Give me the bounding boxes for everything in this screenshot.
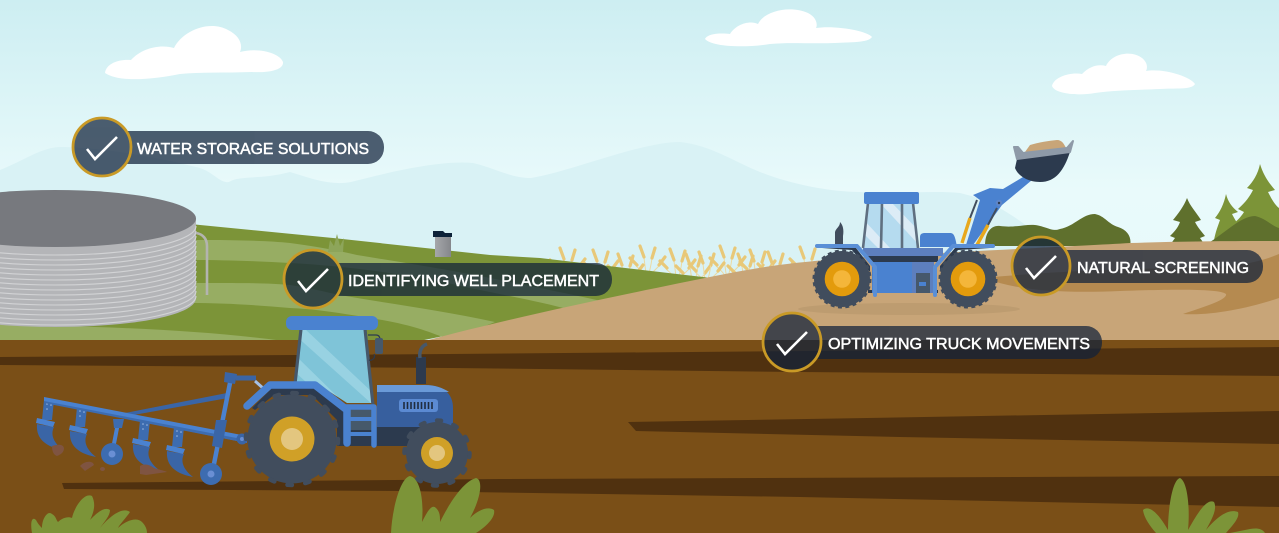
rear wheel	[246, 393, 338, 485]
furrow: lower	[62, 476, 1279, 507]
exhaust	[835, 222, 843, 244]
green striped hill	[0, 224, 720, 345]
plough	[36, 372, 264, 485]
mountains	[0, 142, 1045, 345]
fender and ladder	[247, 385, 374, 445]
cloud: left	[105, 26, 283, 79]
engine panel	[916, 273, 930, 293]
wheat field	[550, 246, 825, 288]
grille	[399, 399, 438, 412]
label: natural screening: NATURAL SCREENING	[1077, 260, 1249, 277]
cab roof	[864, 192, 919, 204]
seat housing	[920, 233, 957, 247]
tan field	[410, 241, 1279, 345]
ground	[0, 340, 1279, 533]
front wheel	[404, 420, 470, 486]
loader wheels	[814, 250, 870, 308]
tractor body	[377, 385, 453, 430]
water tank	[0, 190, 207, 327]
label: optimizing truck movements	[762, 312, 1102, 372]
cloud: right	[1052, 54, 1195, 94]
sky background	[0, 0, 1279, 345]
label: identifying well placement: IDENTIFYING WELL PLACEMENT	[348, 273, 599, 290]
cab window	[862, 203, 920, 248]
label: water storage solutions	[72, 117, 384, 177]
small grass tuft	[328, 234, 344, 252]
bucket with soil	[1014, 140, 1073, 182]
label: natural screening	[1011, 236, 1263, 296]
loader arm	[962, 177, 1032, 245]
ground shadow	[798, 303, 1020, 315]
label: water storage solutions: WATER STORAGE SOLUTIONS	[137, 141, 369, 158]
body	[863, 248, 943, 256]
step block and ladder	[345, 408, 375, 430]
plant: right foreground	[1143, 478, 1265, 533]
tank overflow pipe	[196, 233, 207, 295]
tractor with plough	[36, 316, 470, 486]
plant: left foreground	[31, 495, 147, 533]
loader	[798, 140, 1073, 315]
cloud: centre	[705, 9, 872, 46]
mirror	[368, 335, 383, 360]
plant: centre foreground	[391, 476, 494, 533]
well	[433, 231, 452, 257]
furrow: middle	[628, 411, 1279, 444]
cab window	[295, 329, 373, 405]
label: optimizing truck movements: OPTIMIZING TRUCK MOVEMENTS	[828, 336, 1090, 353]
label: identifying well placement	[283, 249, 612, 309]
darker soil patch	[985, 254, 1279, 314]
loader fenders	[817, 246, 993, 295]
cab roof	[286, 316, 378, 330]
furrow: upper	[0, 347, 1279, 376]
trees and bushes	[985, 164, 1279, 246]
fender shadows	[822, 248, 990, 272]
